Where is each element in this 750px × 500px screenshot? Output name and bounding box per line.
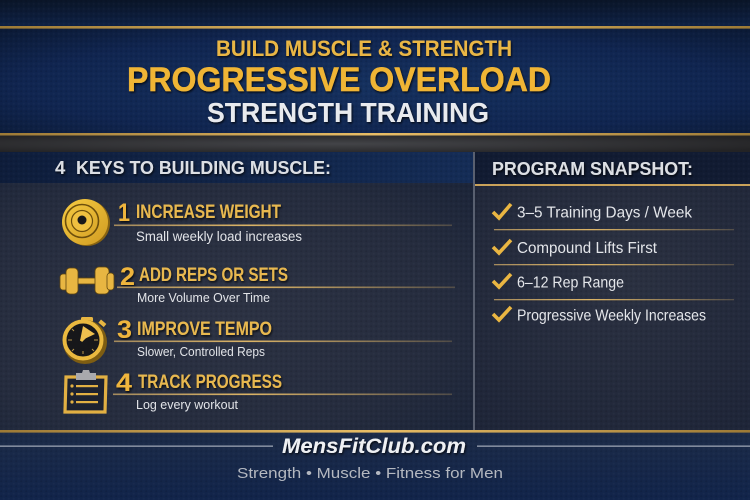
key 3: improve tempo: Slower, Controlled Reps xyxy=(137,344,265,359)
key 1: increase weight xyxy=(114,199,452,244)
snapshot item 3 xyxy=(493,274,734,300)
icon: weight plate xyxy=(62,199,110,246)
snapshot item 2: Compound Lifts First xyxy=(517,240,658,257)
key 4: track progress xyxy=(113,369,452,412)
icon: stopwatch xyxy=(63,317,107,364)
panel: four keys xyxy=(0,152,474,431)
footer brand: MensFitClub.com xyxy=(282,435,466,458)
panel heading: program snapshot xyxy=(475,152,750,186)
panel: separator band xyxy=(0,136,750,152)
snapshot item 3: 6–12 Rep Range xyxy=(517,274,624,292)
footer xyxy=(0,430,750,500)
snapshot item 2 xyxy=(493,240,734,265)
key 4: track progress: Log every workout xyxy=(136,397,238,412)
panel: program snapshot xyxy=(473,152,750,431)
panel heading: four keys: KEYS TO BUILDING MUSCLE: xyxy=(76,157,331,178)
key 2: add reps or sets: More Volume Over Time xyxy=(137,290,270,305)
panel heading: program snapshot: PROGRAM SNAPSHOT: xyxy=(492,158,693,179)
key 3: improve tempo: 3 xyxy=(117,316,132,344)
key 2: add reps or sets: 2 xyxy=(120,263,135,291)
icon: clipboard xyxy=(65,370,106,412)
subtitle: STRENGTH TRAINING xyxy=(207,97,489,128)
snapshot item 1: 3–5 Training Days / Week xyxy=(517,204,693,222)
key 1: increase weight: INCREASE WEIGHT xyxy=(136,202,281,223)
snapshot item 4: Progressive Weekly Increases xyxy=(517,308,706,324)
key 4: track progress: TRACK PROGRESS xyxy=(138,372,282,393)
panel heading: four keys: 4 xyxy=(55,157,66,178)
key 4: track progress: 4 xyxy=(116,369,132,397)
icon: dumbbell xyxy=(60,267,114,294)
key 3: improve tempo: IMPROVE TEMPO xyxy=(137,319,272,340)
key 2: add reps or sets xyxy=(117,263,455,305)
key 3: improve tempo xyxy=(114,316,452,359)
key 2: add reps or sets: ADD REPS OR SETS xyxy=(139,265,288,286)
footer tagline: Strength • Muscle • Fitness for Men xyxy=(237,465,503,482)
snapshot item 1 xyxy=(493,204,734,230)
key 1: increase weight: 1 xyxy=(118,199,130,227)
key 1: increase weight: Small weekly load increases xyxy=(136,229,302,244)
title block xyxy=(127,36,551,128)
panel: header background xyxy=(0,0,750,136)
eyebrow heading: BUILD MUSCLE & STRENGTH xyxy=(216,36,512,61)
main title: PROGRESSIVE OVERLOAD xyxy=(127,61,551,99)
panel heading: four keys xyxy=(0,152,474,183)
